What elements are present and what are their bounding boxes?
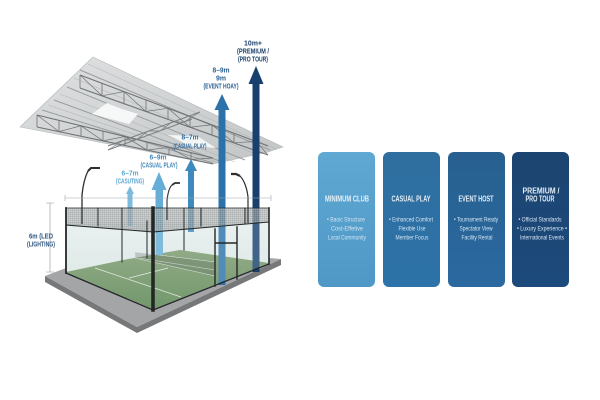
card: event host: Facility Rental	[462, 234, 493, 242]
width dimension line	[65, 195, 271, 201]
card: minimum club: MINIMUM CLUB	[325, 194, 369, 204]
card: premium pro tour: PRO TOUR	[526, 194, 555, 204]
label: 10m+ premium pro tour: (PRO TOUR)	[238, 56, 268, 64]
light pole: right	[231, 174, 248, 223]
card: casual play: • Enhanced Comfort	[389, 216, 433, 224]
card: casual play: CASUAL PLAY	[392, 194, 431, 204]
card: premium pro tour	[512, 152, 569, 287]
label: 6-9m casual play: (CASUAL PLAY)	[140, 162, 178, 170]
height dimension line	[46, 203, 54, 272]
label: 8-7m casual play: (CASUAL PLAY)	[174, 144, 206, 150]
card: minimum club	[318, 152, 375, 287]
card: premium pro tour: International Events	[520, 234, 565, 242]
arrow: 6-9m	[152, 172, 166, 255]
card: casual play: Member Focus	[396, 234, 429, 242]
label: 8-7m casual play	[174, 134, 206, 150]
roof canopy	[20, 57, 283, 164]
label: 10m+ premium pro tour	[237, 40, 269, 64]
light pole: left	[82, 168, 100, 224]
label: 6-9m casual play	[140, 154, 178, 170]
truss: cross brace	[108, 112, 200, 150]
label: 8-7m casual play: 8–7m	[182, 134, 198, 142]
truss: rear	[80, 75, 268, 155]
label: 8-9m event host: 9m	[216, 76, 226, 82]
arrow: 8-9m	[214, 94, 230, 285]
light pole: centre	[167, 183, 180, 220]
illustration: padel court with roof	[20, 57, 283, 333]
card: minimum club: Local Community	[328, 234, 367, 242]
court frame	[66, 208, 269, 310]
label: 6m LED lighting: (LIGHTING)	[27, 242, 55, 248]
skylights	[92, 103, 216, 148]
label: 8-9m event host	[204, 68, 238, 90]
arrow: 8-7m	[185, 159, 197, 232]
card: minimum club: • Basic Structure	[327, 216, 365, 224]
card: minimum club: Cost-Effetive	[331, 226, 363, 232]
truss: front	[37, 115, 213, 164]
card: event host: Spectator View	[460, 226, 493, 232]
label: 10m+ premium pro tour: (PREMIUM /	[237, 48, 269, 56]
card: event host: • Tournament Ready	[454, 216, 499, 224]
card: premium pro tour: • Luxury Experience •	[517, 226, 568, 232]
arrow: 10m+	[248, 66, 264, 272]
card: casual play: Flexible Use	[398, 226, 426, 232]
label: 6-7m casuting	[116, 170, 144, 186]
back glass walls	[66, 222, 269, 272]
label: 6-7m casuting: (CASUTING)	[116, 178, 144, 186]
mesh fence band	[66, 208, 269, 232]
label: 8-9m event host: (EVENT HOAY)	[204, 84, 238, 90]
arrow: 6-7m	[126, 186, 134, 226]
label: 6m LED lighting	[27, 234, 55, 248]
base slab	[45, 248, 281, 333]
height arrows	[126, 66, 264, 285]
label: 6m LED lighting: 6m (LED	[29, 234, 53, 240]
card: premium pro tour: PREMIUM /	[522, 186, 560, 196]
card: premium pro tour: • Official Standards	[518, 216, 562, 224]
card: casual play	[383, 152, 440, 287]
label: 10m+ premium pro tour: 10m+	[244, 40, 262, 48]
card: event host: EVENT HOST	[458, 194, 494, 204]
card: event host	[448, 152, 505, 287]
net	[135, 252, 215, 276]
court floor	[66, 250, 269, 309]
label: 8-9m event host: 8–9m	[212, 68, 230, 74]
label: 6-7m casuting: 6–7m	[122, 170, 138, 178]
front glass panels	[66, 222, 269, 309]
label: 6-9m casual play: 6–9m	[150, 154, 166, 162]
